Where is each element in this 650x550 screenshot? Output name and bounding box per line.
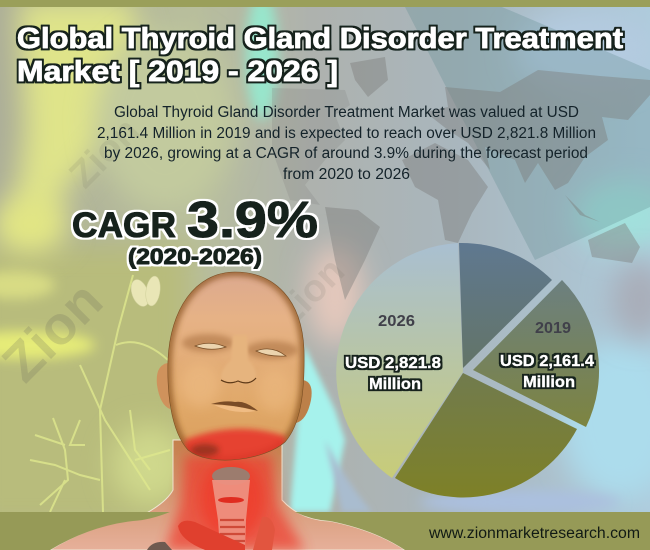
larynx <box>212 467 250 485</box>
label: 2019: 2019 <box>535 320 571 337</box>
watermark: Zion: Zion <box>267 250 353 336</box>
title <box>17 23 623 88</box>
label: 2019 value: USD 2,161.4 <box>500 353 594 370</box>
chin redness <box>185 429 285 470</box>
CAGR callout: 3.9% <box>187 191 318 248</box>
nose <box>221 335 256 383</box>
CAGR callout: CAGR <box>72 206 176 245</box>
label: 2026 value <box>345 355 441 393</box>
slice: lower olive <box>395 373 577 497</box>
website url: www.zionmarketresearch.com <box>428 525 640 542</box>
watermark: Zion: Zion <box>62 110 148 196</box>
label: 2026 value: USD 2,821.8 <box>345 355 441 372</box>
face <box>168 272 304 460</box>
pie chart <box>336 243 599 497</box>
slice: 2026 <box>336 243 463 478</box>
label: 2026: 2026 <box>378 313 415 330</box>
intro paragraph: by 2026, growing at a CAGR of around 3.9% during the forecast period <box>104 145 588 162</box>
icon: thyroid gland <box>128 275 162 309</box>
watermark: Zion <box>0 110 353 393</box>
intro paragraph: 2,161.4 Million in 2019 and is expected to reach over USD 2,821.8 Million <box>97 125 596 142</box>
CAGR callout: (2020-2026) <box>128 244 262 269</box>
title: Market [ 2019 - 2026 ] <box>17 56 338 88</box>
label: 2019 value: Million <box>523 374 575 391</box>
intro paragraph <box>97 104 596 183</box>
mouth <box>211 401 258 411</box>
eyes <box>195 343 286 356</box>
world map <box>272 57 650 300</box>
background veins <box>30 275 170 512</box>
top band <box>0 0 650 7</box>
red throat inflammation <box>165 455 305 550</box>
intro paragraph: Global Thyroid Gland Disorder Treatment Market was valued at USD <box>114 104 579 121</box>
label: 2019 value <box>500 353 594 391</box>
slice: upper dark <box>459 243 552 368</box>
CAGR callout <box>72 191 318 269</box>
illustration: human head and neck <box>50 268 405 550</box>
title: Global Thyroid Gland Disorder Treatment <box>17 23 623 55</box>
slice: 2019 <box>473 280 599 427</box>
label: 2026 value: Million <box>369 376 421 393</box>
intro paragraph: from 2020 to 2026 <box>283 166 410 183</box>
ears <box>157 363 170 409</box>
translucent polygon <box>405 7 650 260</box>
bottom band <box>0 512 650 550</box>
shoulders and neck <box>50 440 405 550</box>
hand at throat <box>147 517 275 550</box>
